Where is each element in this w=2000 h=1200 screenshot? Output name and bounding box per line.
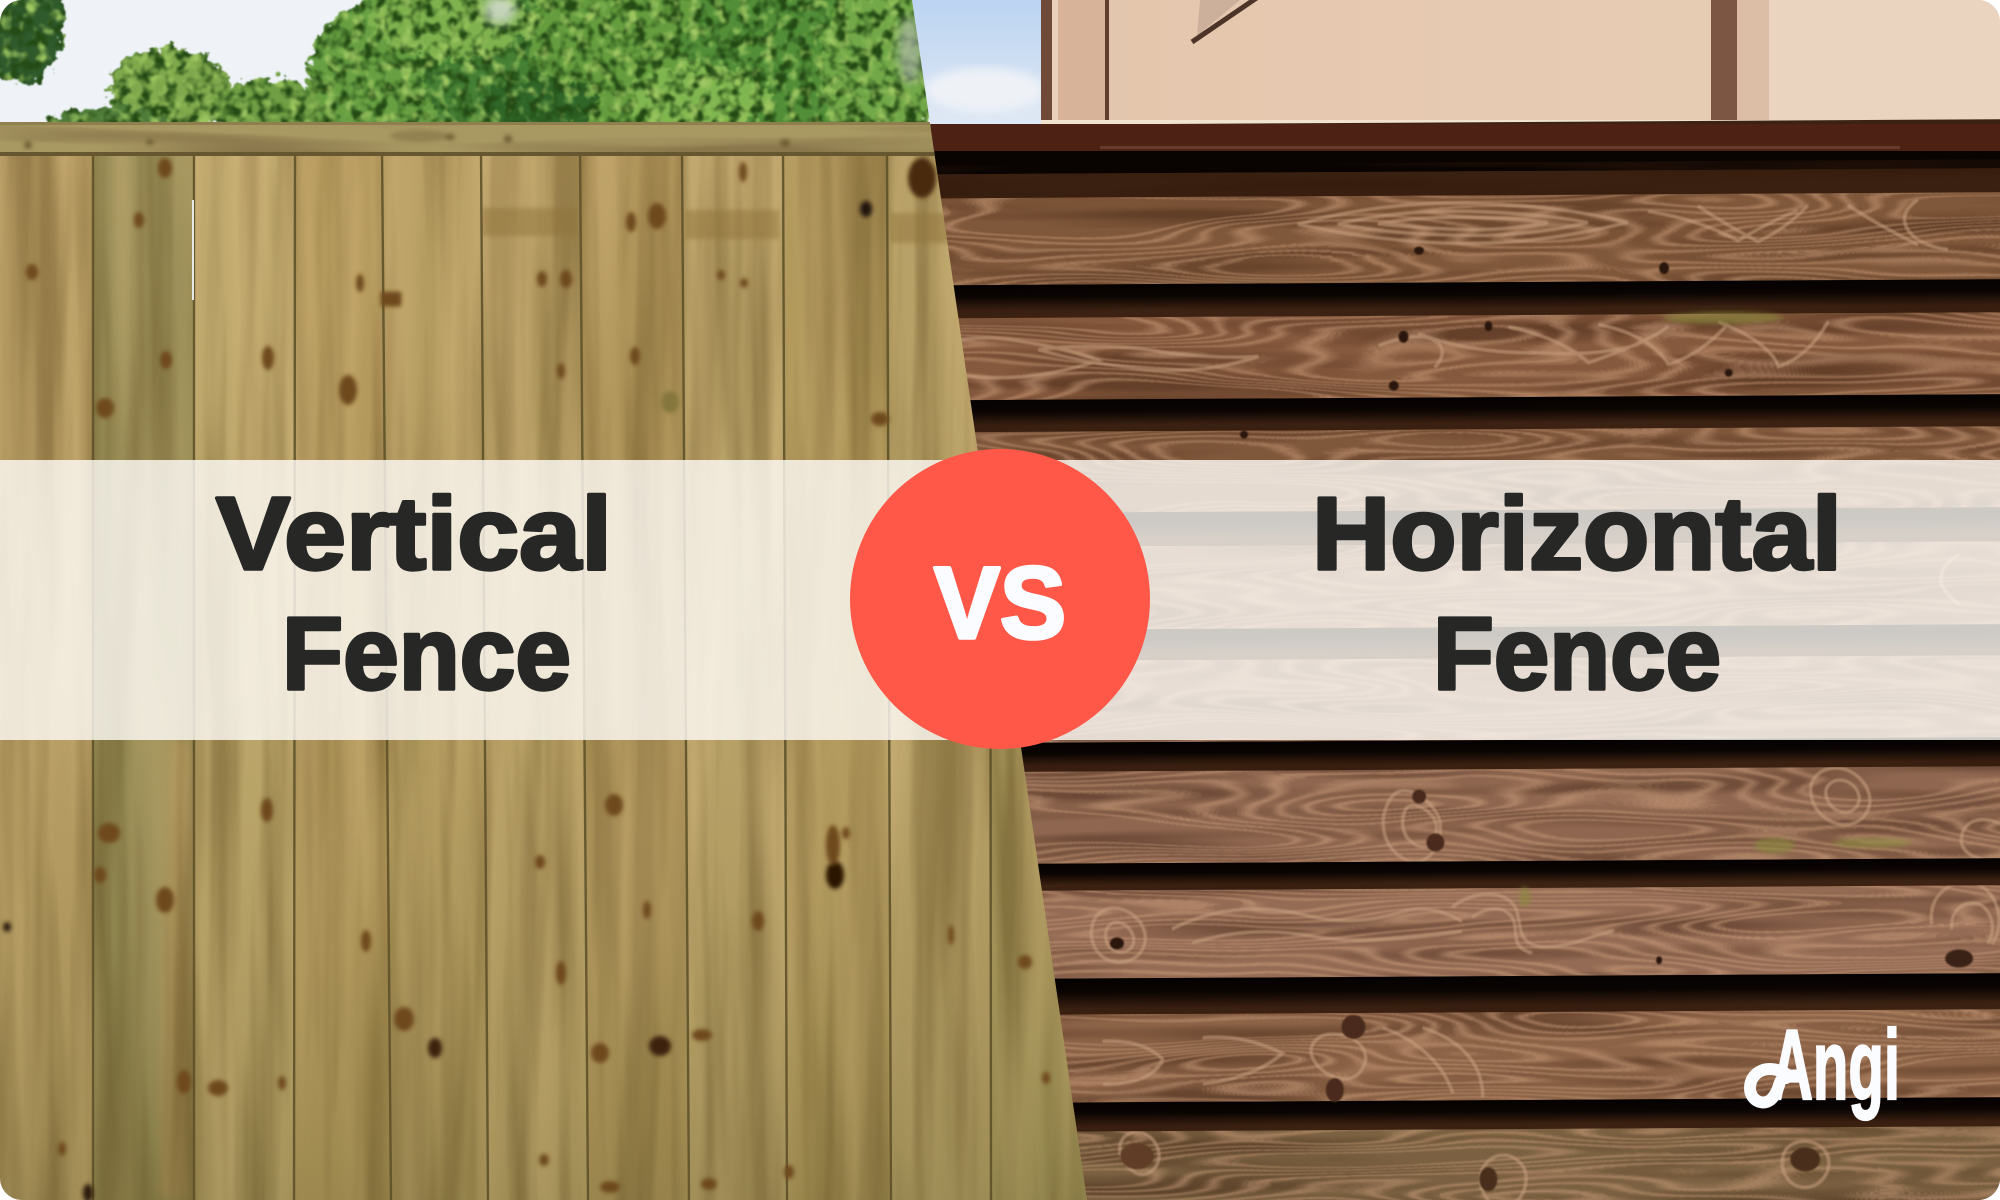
tinted cross patches (381, 208, 950, 307)
panel: horizontal fence photo (897, 0, 2000, 1200)
heading: Horizontal Fence: Fence (1433, 596, 1721, 711)
knots on planks (3, 158, 1050, 1200)
dark grain in gaps (936, 160, 2000, 1014)
heading: Vertical Fence: Vertical (216, 476, 612, 591)
semi-transparent title band (0, 460, 2000, 740)
heading: Horizontal Fence (1312, 476, 1842, 711)
orange streak beside olive plank (158, 740, 192, 1200)
knots on boards (1106, 243, 1974, 1193)
board cast shadows (898, 279, 2000, 1128)
fence planks (0, 150, 1100, 1200)
tree foliage (0, 0, 931, 130)
top rail (0, 122, 960, 156)
wood grain on boards (897, 144, 2000, 1200)
sky behind trees (0, 0, 960, 126)
moss patches (1515, 311, 1912, 907)
heading: Vertical Fence: Fence (282, 596, 571, 711)
heading: Vertical Fence (216, 476, 612, 711)
heading: Horizontal Fence: Horizontal (1312, 476, 1842, 591)
pale gaps in canopy (484, 0, 922, 84)
VS badge (850, 449, 1150, 749)
VS badge: VS (934, 546, 1066, 660)
house wall above fence (900, 0, 2000, 126)
fascia board (900, 124, 2000, 151)
plank seams (93, 150, 991, 1200)
logo: Angi: Angi (1771, 1009, 1900, 1120)
horizontal boards (897, 119, 2000, 1200)
logo: Angi (1750, 1009, 1900, 1120)
panel: vertical fence photo (0, 0, 1100, 1200)
